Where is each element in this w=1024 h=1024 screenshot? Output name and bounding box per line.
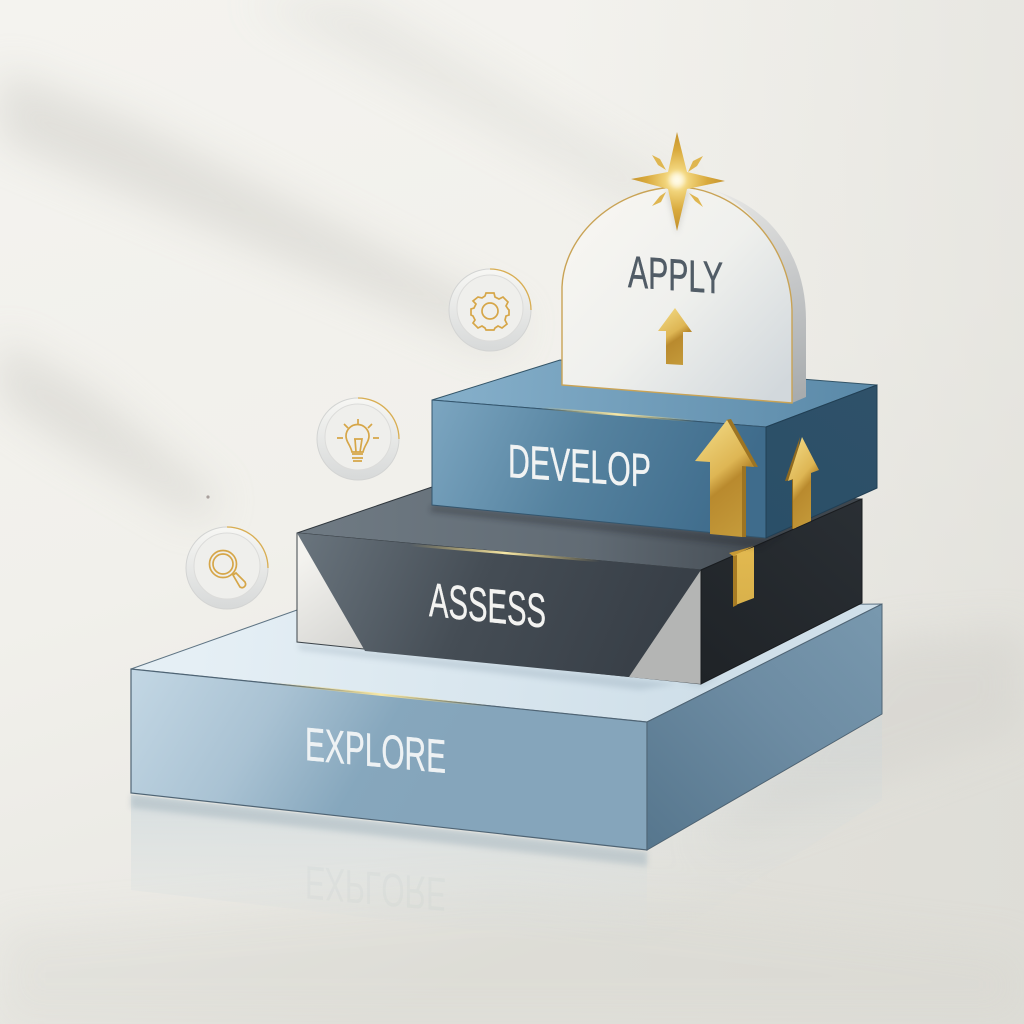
step 1: explore (131, 604, 882, 850)
shadow cast by assess step (297, 644, 720, 690)
shadow cast by develop step (430, 505, 790, 548)
arrow: gold arrow inside apply (658, 308, 692, 365)
icon: gear button (449, 269, 531, 351)
reflection of the base step on the floor (131, 716, 882, 950)
icon: gold four-point star (631, 132, 725, 234)
reflection of the base step on the floor: EXPLORE (305, 856, 446, 922)
arrow: large gold arrow on develop front (695, 419, 758, 537)
panel: assess grey wedge (629, 570, 701, 684)
icon: magnifier button (186, 527, 268, 609)
step 3: develop (432, 360, 877, 538)
label: explore: EXPLORE (305, 717, 446, 783)
icon: gold tab on assess corner (729, 546, 754, 607)
arrow: small gold arrow on develop side (785, 437, 819, 529)
label: apply: APPLY (628, 246, 723, 304)
step 2: assess (297, 487, 862, 684)
label: develop: DEVELOP (508, 434, 651, 497)
panel: assess dark trapezoid (297, 533, 701, 677)
icon: light bulb button (317, 398, 399, 480)
label: assess: ASSESS (429, 573, 546, 639)
apply arch block (562, 187, 806, 403)
